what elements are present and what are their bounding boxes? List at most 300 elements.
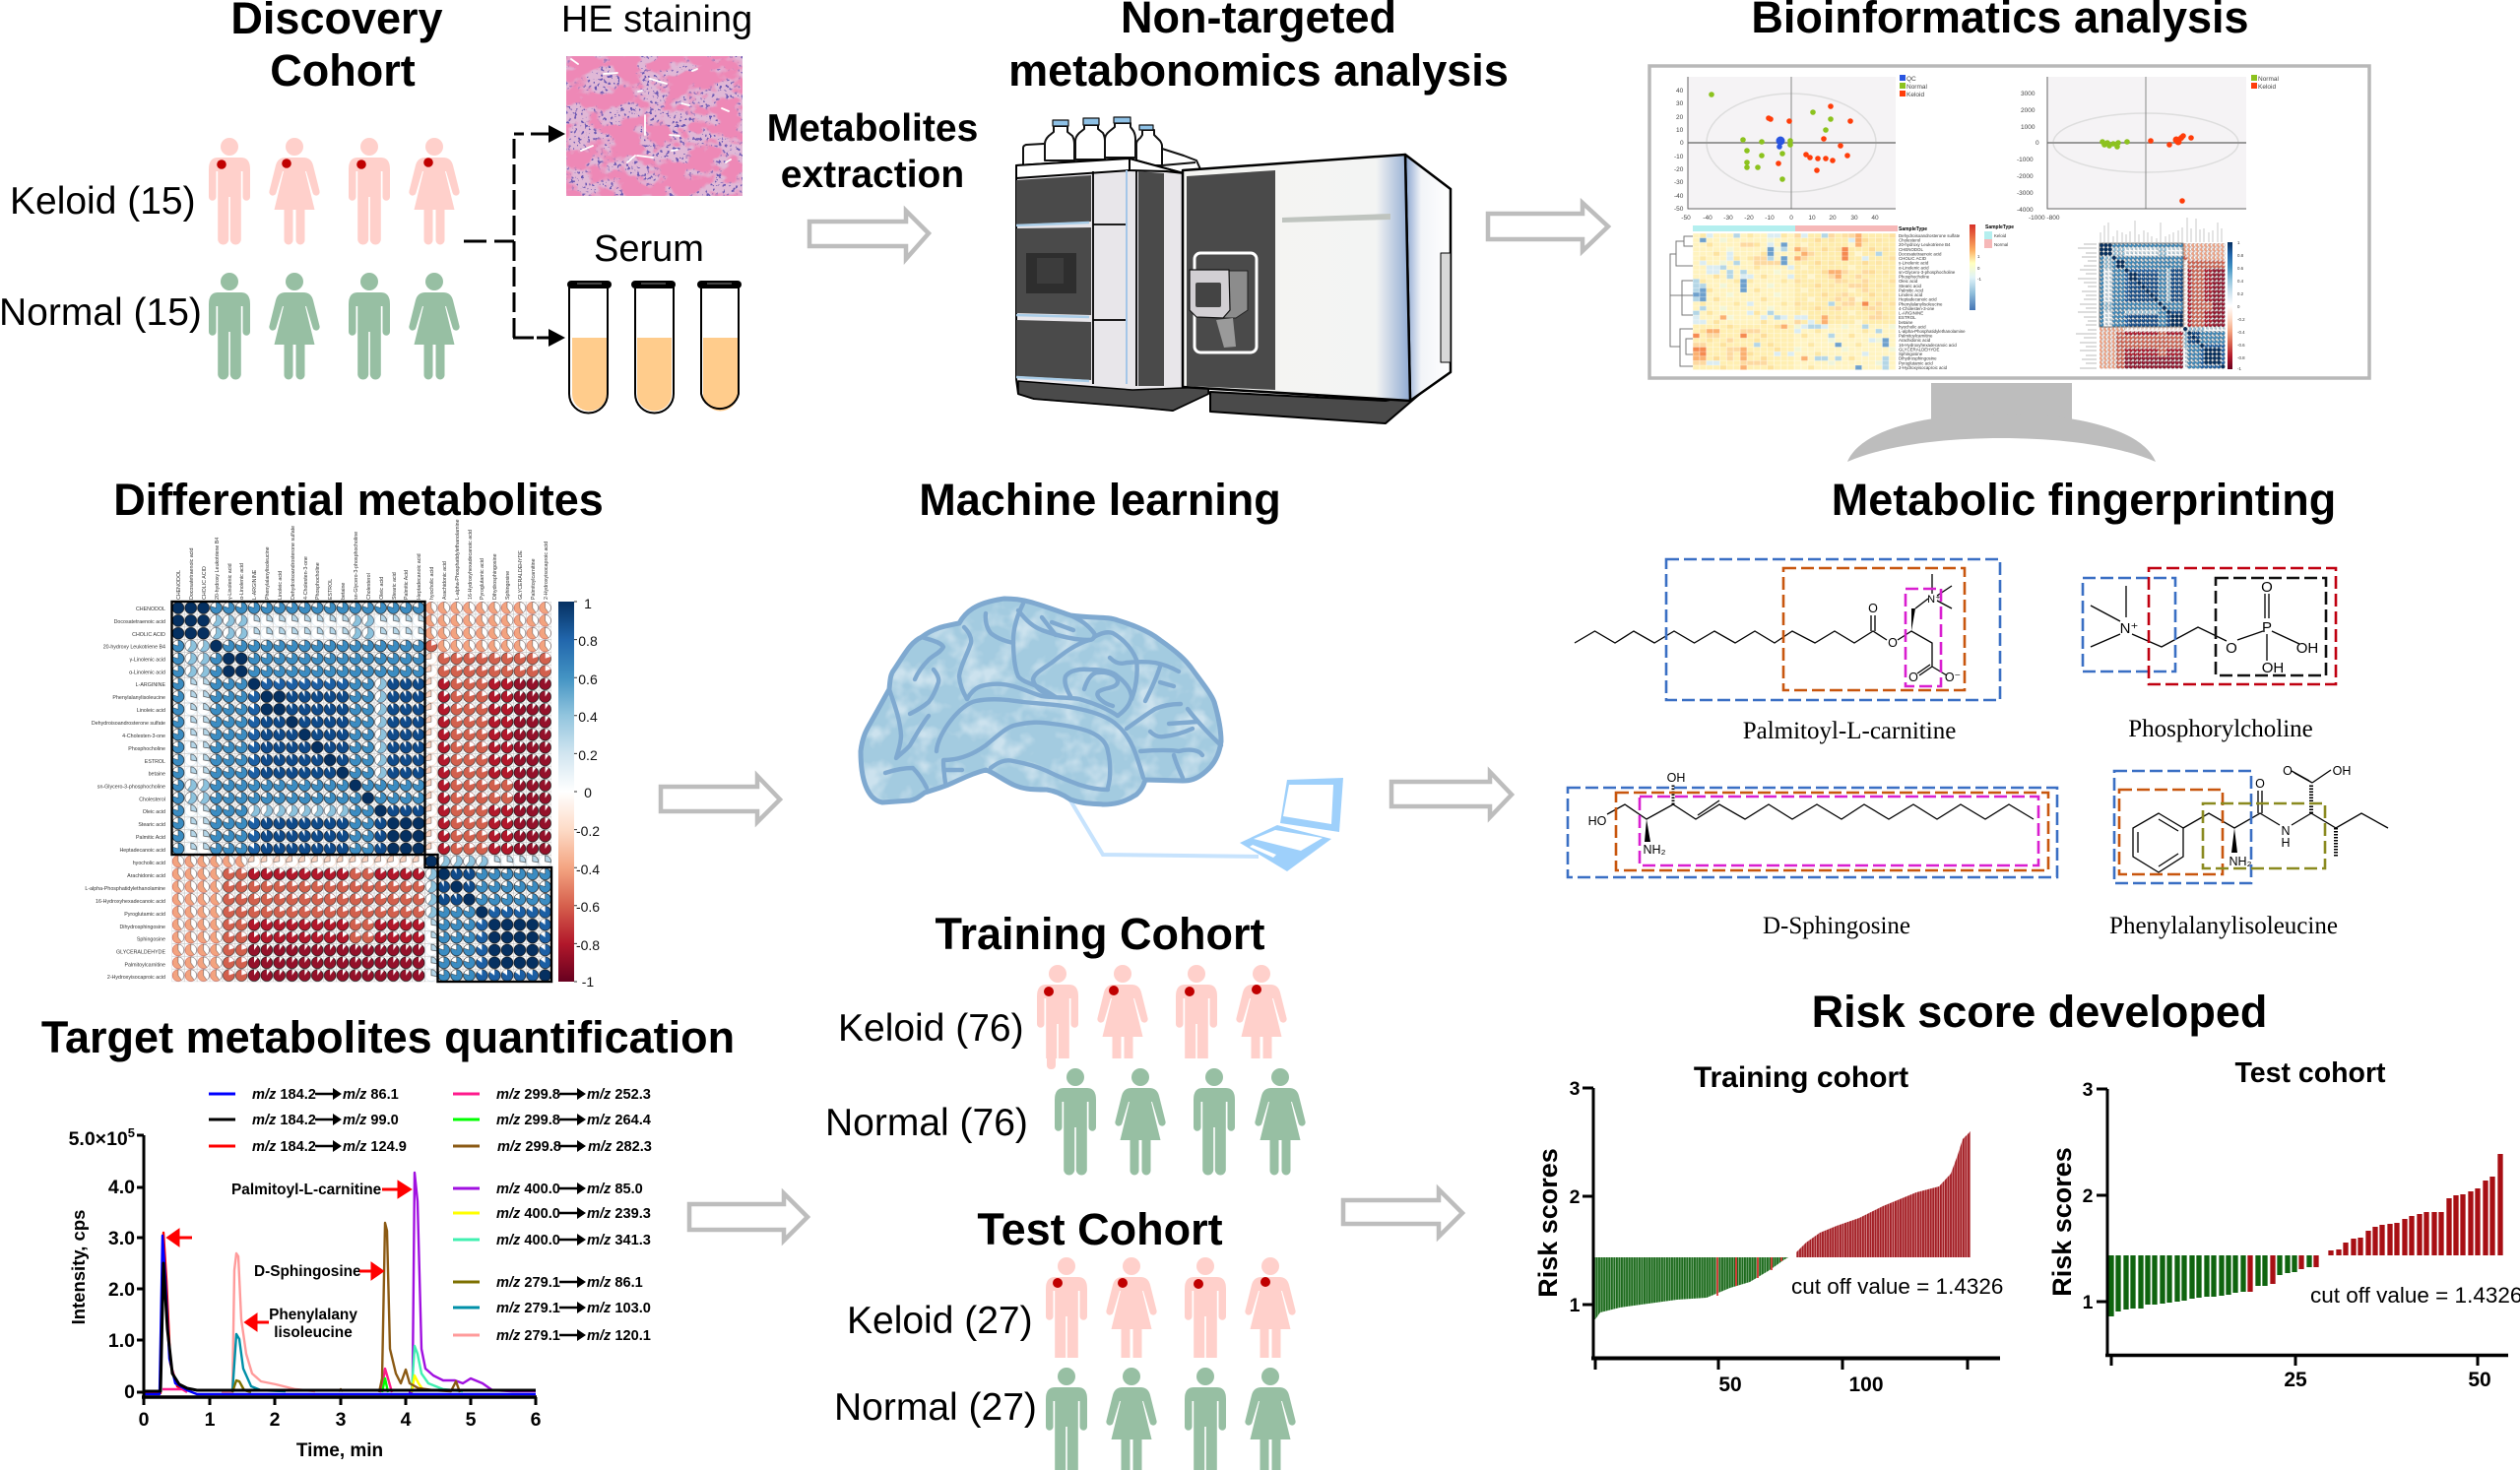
heading: Target metabolites quantification: Target metabolites quantification [41, 1012, 735, 1062]
legend: m/z 279.1 [496, 1328, 560, 1344]
chart: metabolite heatmap: Palmitoylcarnitine [1899, 334, 1933, 339]
heading: Machine learning: Machine learning [919, 475, 1281, 525]
chart: PCA score plot: -50 [1674, 206, 1684, 213]
y-axis tick labels: 1.0 [108, 1330, 135, 1352]
heading: Metabolites extraction [767, 107, 978, 196]
peak annotations: D-Sphingosine [254, 1263, 361, 1280]
legend: m/z 282.3 [588, 1139, 652, 1155]
colour scale: -0.4 [576, 862, 600, 877]
cut-off label: cut off value = 1.4326 [2310, 1283, 2520, 1308]
column labels: Dihydrosphingosine [492, 553, 498, 600]
chart: metabolite heatmap: α-Linolenic acid [1899, 265, 1929, 270]
colour scale: 0.2 [578, 747, 598, 763]
column labels: hyocholic acid [429, 567, 435, 600]
row labels: sn-Glycero-3-phosphocholine [97, 784, 165, 790]
row labels: Stearic acid [138, 822, 165, 828]
structure: D-Sphingosine: HO [1588, 814, 1607, 828]
column labels: CHOLIC ACID [202, 566, 208, 600]
column labels: Stearic acid [392, 572, 398, 600]
structure: Phosphorylcholine: P [2262, 619, 2272, 636]
column labels: α-Linolenic acid [239, 563, 245, 600]
y-axis tick labels: 2.0 [108, 1279, 135, 1301]
x-axis tick labels: 6 [531, 1409, 542, 1431]
chart: PCA score plot: 20 [1829, 215, 1837, 222]
tick labels [1570, 1078, 1884, 1396]
chart: OPLS-DA score plot: 1000 [2021, 124, 2035, 131]
chart: metabolite heatmap: -1 [1977, 277, 1981, 282]
icons: keloid patients, training cohort [1037, 965, 1287, 1071]
column labels: Heptadecanoic acid [417, 553, 422, 600]
chart: metabolite heatmap: Phenylalanylisoleucine [1899, 301, 1943, 306]
legend: m/z 120.1 [587, 1328, 651, 1344]
row labels: γ-Linolenic acid [129, 658, 165, 664]
row labels: 2-Hydroxyisocaproic acid [107, 975, 165, 981]
chart: OPLS-DA score plot: -2000 [2017, 173, 2034, 180]
legend: m/z 124.9 [343, 1139, 407, 1155]
chart: metabolite heatmap: 2-Hydroxyisocaproic acid [1899, 365, 1948, 370]
chart: metabolite heatmap: Keloid [1994, 233, 2007, 238]
tick labels: 1 [1570, 1295, 1581, 1316]
column labels: 2-Hydroxyisocaproic acid [544, 542, 549, 600]
icons: normal controls, training cohort [1055, 1068, 1306, 1176]
chart: PCA score plot: -30 [1674, 179, 1684, 186]
chart: metabolite heatmap: ESTROL [1899, 315, 1916, 320]
legend: m/z 99.0 [343, 1113, 399, 1128]
structure: Phenylalanylisoleucine: O [2255, 777, 2265, 791]
column labels: sn-Glycero-3-phosphocholine [354, 532, 359, 600]
column labels [176, 519, 549, 600]
chart: OPLS-DA score plot: 0 [2035, 140, 2039, 147]
structure: D-Sphingosine: OH [1667, 771, 1685, 785]
chart: metabolite heatmap: Pyroglutamic acid [1899, 360, 1933, 365]
column labels: CHENODOL [176, 570, 182, 600]
chart: metabolite heatmap: γ-Linolenic acid [1899, 261, 1929, 266]
chart: metabolite heatmap: SampleType [1985, 224, 2014, 230]
colour scale: -0.2 [576, 823, 600, 839]
column labels: Palmitoylcarnitine [531, 558, 537, 600]
x-axis tick labels: 0 [139, 1409, 150, 1431]
tick labels: 50 [2468, 1369, 2491, 1391]
chart: OPLS-DA score plot: -1000 -800 [2029, 215, 2060, 222]
x-axis tick labels: 3 [336, 1409, 347, 1431]
chart: small correlation matrix: -0.2 [2237, 317, 2245, 322]
column labels: Dehydroisoandrosterone sulfate [291, 526, 296, 600]
tick labels: 2 [2083, 1185, 2094, 1207]
chart: OPLS-DA score plot: Normal [2258, 76, 2280, 83]
x-axis tick labels: 5 [466, 1409, 477, 1431]
high-score bars [1796, 1131, 1971, 1257]
chart: metabolite heatmap [1670, 224, 2014, 370]
heading: Non-targeted metabonomics analysis [1008, 0, 1509, 96]
column labels: Arachidonic acid [442, 561, 448, 600]
row labels: GLYCERALDEHYDE [116, 949, 165, 955]
column labels: GLYCERALDEHYDE [518, 550, 524, 600]
axes [2097, 1089, 2508, 1366]
column labels: Phenylalanylisoleucine [265, 546, 271, 600]
peak annotations: lisoleucine [274, 1324, 353, 1341]
chart: metabolite heatmap: CHENODOL [1899, 247, 1923, 252]
chart: OPLS-DA score plot: -3000 [2017, 190, 2034, 197]
chart: small correlation matrix: 0 [2237, 304, 2240, 309]
structure: Phenylalanylisoleucine: O [2283, 764, 2293, 778]
chart: PCA score plot: Keloid [1906, 92, 1924, 98]
chart: metabolite heatmap: 16-Hydroxyhexadecanoic acid [1899, 343, 1957, 348]
heading: Differential metabolites: Differential metabolites [113, 475, 604, 525]
chart: metabolite heatmap: hyocholic acid [1899, 324, 1926, 329]
structure: Phenylalanylisoleucine: NH₂ [2229, 855, 2252, 868]
chart: small correlation matrix: -1 [2237, 366, 2241, 371]
chart: OPLS-DA score plot: Keloid [2258, 84, 2276, 91]
chart: small correlation matrix: -0.8 [2237, 355, 2245, 360]
chart: metabolite heatmap: 20-hydroxy Leukotriene B4 [1899, 242, 1951, 247]
chart: PCA score plot: 20 [1676, 114, 1684, 121]
legend: m/z 86.1 [587, 1275, 643, 1291]
column labels: 16-Hydroxyhexadecanoic acid [468, 530, 474, 600]
legend: m/z 299.8 [496, 1087, 560, 1103]
column labels: Linoleic acid [278, 571, 284, 600]
structure: Phenylalanylisoleucine [2109, 764, 2388, 939]
arrow: cohorts to risk score [1343, 1189, 1462, 1237]
arrow: LC-MS to bioinformatics [1488, 203, 1608, 251]
heading: Serum: Serum [594, 228, 704, 270]
chart: PCA score plot: Normal [1906, 84, 1928, 91]
label: Normal (76): Normal (76) [825, 1102, 1028, 1144]
image: HE stained tissue [566, 56, 743, 196]
chart: small correlation matrix: -0.4 [2237, 330, 2245, 335]
icon: brain linked to laptop [857, 596, 1343, 871]
legend: m/z 103.0 [587, 1301, 651, 1316]
chart: metabolite heatmap: Dehydroisoandrosterone sulfate [1899, 233, 1961, 238]
row labels: betaine [149, 772, 165, 778]
chart: metabolite heatmap: Palmitic Acid [1899, 288, 1923, 292]
structure: Phosphorylcholine: OH [2296, 640, 2318, 657]
chart: metabolite heatmap: Docosatetraenoic acid [1899, 252, 1942, 256]
chart: PCA score plot: -50 [1681, 215, 1691, 222]
y-axis tick labels: 5.0×10 [69, 1128, 128, 1150]
chart: PCA score plot: -30 [1723, 215, 1733, 222]
block outlines [171, 602, 551, 982]
colour scale [558, 596, 600, 990]
peak annotations: Palmitoyl-L-carnitine [231, 1182, 382, 1198]
chart title: Training cohort [1694, 1061, 1908, 1094]
x-axis tick labels: 4 [401, 1409, 412, 1431]
peak annotations [168, 1182, 410, 1341]
chart: test cohort risk scores [2047, 1057, 2520, 1391]
dashed split arrows to tissue and serum [464, 125, 565, 347]
chart: metabolite heatmap: Normal [1994, 242, 2008, 247]
colour scale: 0.8 [578, 633, 598, 649]
legend: m/z 184.2 [252, 1113, 316, 1128]
axes [137, 1135, 537, 1405]
chart: small correlation matrix: -0.6 [2237, 343, 2245, 348]
green bars [2111, 1255, 2309, 1316]
column labels: L-ARGININE [252, 569, 258, 600]
heading: Metabolic fingerprinting: Metabolic fingerprinting [1832, 475, 2336, 525]
column labels: Docosatetraenoic acid [189, 548, 195, 600]
chart: PCA score plot: 30 [1850, 215, 1858, 222]
icons: normal controls, discovery cohort [209, 273, 460, 380]
row labels: 16-Hydroxyhexadecanoic acid [96, 899, 165, 905]
row labels: ESTROL [145, 759, 165, 765]
column labels: Cholesterol [366, 573, 372, 600]
column labels: Pyroglutamic acid [480, 558, 485, 600]
legend: m/z 299.8 [497, 1139, 561, 1155]
structure: Palmitoyl-L-carnitine: O [1908, 671, 1918, 684]
chart: PCA score plot: -20 [1744, 215, 1754, 222]
tick labels: 2 [1570, 1186, 1581, 1208]
low-score bars [1594, 1257, 1788, 1319]
structure: Phosphorylcholine: N⁺ [2120, 620, 2138, 637]
structure: Phenylalanylisoleucine: N [2281, 824, 2291, 838]
x-axis tick labels [139, 1409, 542, 1431]
heading: Training Cohort: Training Cohort [936, 909, 1264, 959]
structure: Phosphorylcholine: O [2261, 579, 2273, 596]
axes [1583, 1088, 2000, 1370]
icon: LC-MS instrument [1016, 117, 1451, 423]
chart: metabolite heatmap: SampleType [1899, 226, 1927, 232]
label: Keloid (27): Keloid (27) [847, 1300, 1033, 1342]
row labels: Pyroglutamic acid [124, 912, 165, 918]
structure: Palmitoyl-L-carnitine: O⁻ [1945, 671, 1961, 684]
y-axis tick labels: 5 [128, 1125, 135, 1140]
structure: Phosphorylcholine: O [2226, 640, 2237, 657]
chart: PCA score plot: 30 [1676, 100, 1684, 107]
column labels: Oleic acid [379, 577, 385, 600]
icons: normal controls, test cohort [1046, 1368, 1296, 1470]
colour scale: 0.4 [578, 709, 598, 725]
legend: m/z 299.8 [496, 1113, 560, 1128]
traces [144, 1173, 536, 1394]
row labels: 4-Cholesten-3-one [122, 734, 165, 739]
legend [209, 1087, 652, 1344]
chart: PCA score plot: QC [1906, 76, 1916, 83]
structure: D-Sphingosine [1568, 771, 2057, 939]
chart title: Test cohort [2234, 1057, 2386, 1089]
legend: m/z 184.2 [252, 1087, 316, 1103]
legend: m/z 341.3 [587, 1233, 651, 1248]
name: Phosphorylcholine: Phosphorylcholine [2128, 716, 2313, 742]
legend: m/z 86.1 [343, 1087, 399, 1103]
row labels: 20-hydroxy Leukotriene B4 [103, 644, 165, 650]
chart: metabolite heatmap: Stearic acid [1899, 284, 1921, 288]
chart: metabolite heatmap: Cholesterol [1899, 238, 1920, 243]
chart: small correlation matrix: 0.2 [2237, 291, 2244, 296]
row labels: Dehydroisoandrosterone sulfate [92, 721, 165, 727]
row labels: L-alpha-Phosphatidylethanolamine [85, 886, 165, 892]
chart: PCA score plot: 10 [1808, 215, 1816, 222]
row labels: Palmitoylcarnitine [124, 963, 165, 969]
chart: metabolite heatmap: CHOLIC ACID [1899, 256, 1926, 261]
chart: metabolite heatmap: betaine [1899, 320, 1913, 325]
structure: Phenylalanylisoleucine: OH [2333, 764, 2351, 778]
chart: OPLS-DA score plot: 2000 [2021, 107, 2035, 114]
row labels: Cholesterol [139, 798, 165, 803]
structure: Phenylalanylisoleucine: H [2281, 836, 2291, 850]
arrow: differential metabolites to machine learning [661, 776, 780, 822]
column labels: Phosphocholine [315, 562, 321, 600]
row labels: Phosphocholine [128, 746, 165, 752]
legend: m/z 264.4 [587, 1113, 652, 1128]
chart: PCA score plot: -20 [1674, 166, 1684, 173]
chart: small correlation matrix: 1 [2237, 240, 2240, 245]
legend: m/z 279.1 [496, 1275, 560, 1291]
red bars [2250, 1154, 2500, 1292]
icon: serum tubes [567, 281, 742, 414]
row labels: Palmitic Acid [136, 835, 165, 841]
name: D-Sphingosine: D-Sphingosine [1763, 913, 1910, 939]
chart: training cohort risk scores [1533, 1061, 2003, 1396]
structure: Phosphorylcholine [2083, 568, 2336, 742]
structure: Palmitoyl-L-carnitine [1575, 559, 2000, 744]
row labels: Arachidonic acid [127, 873, 165, 879]
tick labels: 3 [2083, 1079, 2094, 1101]
column labels: Sphingosine [505, 571, 511, 600]
icons: keloid patients, discovery cohort [209, 138, 460, 244]
tick labels: 3 [1570, 1078, 1581, 1100]
heading: Risk score developed: Risk score developed [1812, 987, 2267, 1037]
tick labels: 25 [2284, 1369, 2307, 1391]
chart: metabolite heatmap: Phosphocholine [1899, 275, 1930, 280]
chart: OPLS-DA score plot: -4000 [2017, 207, 2034, 214]
row labels: Sphingosine [137, 937, 165, 943]
row labels: Docosatetraenoic acid [114, 619, 165, 625]
panel: monitor with analysis plots [1649, 66, 2369, 378]
y-axis tick labels [69, 1125, 135, 1403]
arrow: extraction to LC-MS [809, 211, 929, 259]
heading: HE staining: HE staining [561, 0, 752, 40]
chart: OPLS-DA score plot [2017, 75, 2280, 222]
structure: Palmitoyl-L-carnitine: O [1868, 602, 1878, 615]
arrow: quantification to cohorts [689, 1193, 808, 1241]
chart: metabolite correlation matrix [85, 519, 600, 990]
row labels: α-Linolenic acid [129, 670, 165, 675]
column labels: 20-hydroxy Leukotriene B4 [215, 538, 221, 600]
chart: small correlation matrix: 0.6 [2237, 266, 2244, 271]
column labels: betaine [341, 583, 347, 600]
structure: Phosphorylcholine: OH [2262, 660, 2284, 676]
chart: PCA score plot: 40 [1676, 88, 1684, 95]
heading: Metabolites extraction: Metabolites [767, 107, 978, 150]
row labels: Dihydrosphingosine [119, 925, 165, 930]
y-axis tick labels: 0 [124, 1381, 135, 1403]
colour scale: -0.8 [576, 937, 600, 953]
chart: metabolite heatmap: 4-Cholesten-3-one [1899, 306, 1935, 311]
chart: metabolite heatmap: Linoleic acid [1899, 292, 1923, 297]
chart: metabolite heatmap: L-ARGININE [1899, 311, 1923, 315]
structure: D-Sphingosine: NH₂ [1644, 843, 1666, 857]
chart: metabolite heatmap: Arachidonic acid [1899, 338, 1931, 343]
x-axis tick labels: 2 [270, 1409, 281, 1431]
label: Normal (15): Normal (15) [0, 291, 202, 334]
column labels: 4-Cholesten-3-one [303, 556, 309, 600]
cells [171, 602, 551, 982]
chart: metabolite heatmap: GLYCERALDEHYDE [1899, 347, 1939, 352]
column labels: Palmitic Acid [404, 570, 410, 600]
chart: metabolite heatmap: Heptadecanoic acid [1899, 297, 1937, 302]
x-axis tick labels: 1 [205, 1409, 216, 1431]
legend: m/z 85.0 [587, 1182, 643, 1197]
colour scale: 0 [584, 785, 592, 800]
arrow: machine learning to fingerprinting [1391, 772, 1512, 817]
icon: monitor stand [1847, 383, 2156, 462]
legend: m/z 239.3 [587, 1206, 651, 1222]
chart: PCA score plot: 0 [1680, 140, 1684, 147]
legend: m/z 279.1 [496, 1301, 560, 1316]
colour scale: -0.6 [576, 899, 600, 915]
tick labels: 50 [1718, 1374, 1742, 1396]
structure: Palmitoyl-L-carnitine: O [1888, 636, 1898, 650]
chart: PCA score plot: -40 [1703, 215, 1712, 222]
row labels: L-ARGININE [136, 682, 165, 688]
chart: small correlation matrix: 0.4 [2237, 279, 2244, 284]
heading: Test Cohort: Test Cohort [977, 1204, 1223, 1254]
column labels: L-alpha-Phosphatidylethanolamine [455, 519, 461, 600]
chart: PCA score plot [1674, 75, 1928, 222]
tick labels [2083, 1079, 2491, 1391]
row labels: CHOLIC ACID [132, 632, 165, 638]
legend: m/z 252.3 [587, 1087, 651, 1103]
y-axis tick labels: 4.0 [108, 1177, 135, 1198]
chart: metabolite heatmap: sn-Glycero-3-phosphocholine [1899, 270, 1956, 275]
heading: Discovery Cohort [230, 0, 443, 96]
tick labels: 1 [2083, 1292, 2094, 1313]
chart: OPLS-DA score plot: 3000 [2021, 91, 2035, 97]
chart: PCA score plot: 40 [1871, 215, 1879, 222]
row labels: hyocholic acid [133, 861, 165, 866]
colour scale: -1 [582, 974, 594, 990]
column labels: ESTROL [328, 579, 334, 600]
chart: MRM chromatogram [68, 1087, 652, 1461]
heading: Non-targeted metabonomics analysis: metabonomics analysis [1008, 45, 1509, 96]
structure: Palmitoyl-L-carnitine: N⁺ [1927, 594, 1941, 606]
icons: keloid patients, test cohort [1046, 1257, 1296, 1365]
legend: m/z 184.2 [252, 1139, 316, 1155]
chart: PCA score plot: 0 [1789, 215, 1793, 222]
chart: metabolite heatmap: Sphingosine [1899, 352, 1923, 356]
chart: small correlation matrix: 0.8 [2237, 253, 2244, 258]
row labels [85, 607, 165, 981]
chart: small correlation matrix [2076, 218, 2245, 371]
chart: metabolite heatmap: Oleic acid [1899, 279, 1918, 284]
chart: PCA score plot: -10 [1765, 215, 1775, 222]
chart: metabolite heatmap: Dihydrosphingosine [1899, 356, 1937, 361]
colour scale: 0.6 [578, 671, 598, 687]
cut-off label: cut off value = 1.4326 [1791, 1274, 2003, 1299]
chart: metabolite heatmap: 0 [1977, 266, 1980, 271]
label: Keloid (15): Keloid (15) [10, 180, 196, 223]
row labels: Heptadecanoic acid [119, 848, 165, 854]
chart: metabolite heatmap: 1 [1977, 254, 1980, 259]
icon: laptop [1240, 778, 1343, 871]
y-axis title: Risk scores [2047, 1147, 2077, 1297]
colour scale: 1 [584, 596, 592, 611]
column labels: γ-Linolenic acid [227, 563, 233, 600]
row labels: Oleic acid [143, 809, 165, 815]
y-axis tick labels: 3.0 [108, 1228, 135, 1249]
name: Palmitoyl-L-carnitine: Palmitoyl-L-carnitine [1743, 718, 1956, 744]
heading: Metabolites extraction: extraction [781, 154, 964, 196]
legend: m/z 400.0 [496, 1233, 560, 1248]
chart: PCA score plot: 10 [1676, 127, 1684, 134]
row labels: Linoleic acid [137, 708, 165, 714]
chart: OPLS-DA score plot: -1000 [2017, 157, 2034, 163]
name: Phenylalanylisoleucine: Phenylalanylisoleucine [2109, 913, 2338, 939]
row labels: Phenylalanylisoleucine [112, 695, 165, 701]
label: Keloid (76): Keloid (76) [838, 1007, 1024, 1050]
heading: Discovery Cohort: Cohort [270, 45, 416, 96]
label: Normal (27): Normal (27) [834, 1386, 1037, 1429]
chart: PCA score plot: -40 [1674, 193, 1684, 200]
